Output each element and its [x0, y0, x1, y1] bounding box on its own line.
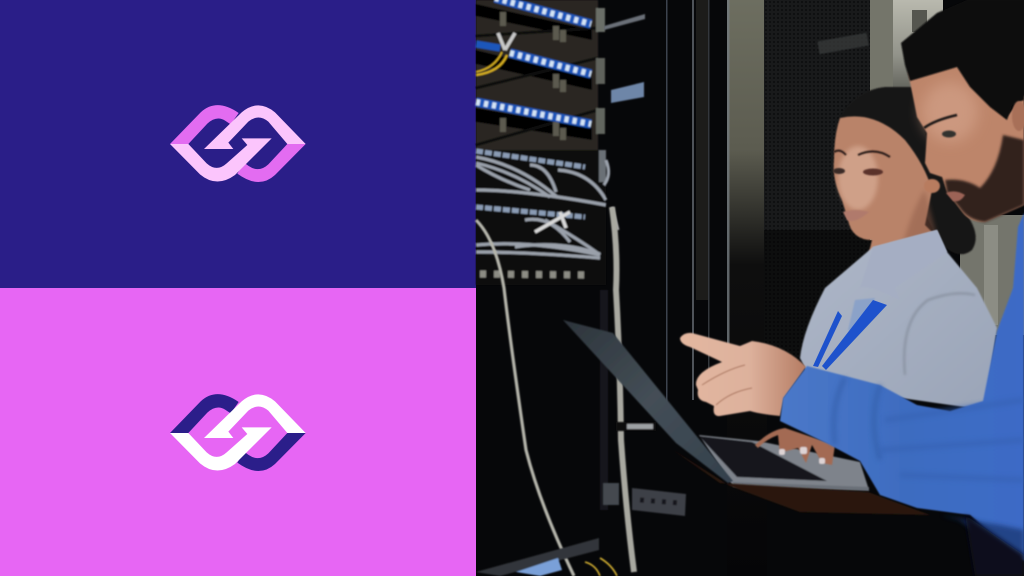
yellow fibre cable — [476, 55, 507, 75]
knob row — [480, 274, 588, 275]
man: beard — [945, 135, 1024, 222]
vent accents — [604, 14, 645, 103]
man: brow and eye — [924, 115, 965, 201]
woman: facial features — [833, 151, 940, 221]
man: pointing hand — [680, 333, 806, 416]
icon: logo on navy — [170, 105, 306, 182]
server rack — [476, 0, 618, 510]
rack bracket — [603, 422, 686, 516]
blue patch panels — [495, 0, 591, 24]
man: hair — [901, 0, 1024, 120]
bottom patch panel — [476, 538, 617, 576]
panel: pink logo background — [0, 288, 476, 576]
woman: hand on keyboard — [755, 428, 835, 465]
grey network cables — [476, 157, 609, 258]
woman: face and neck — [834, 116, 940, 290]
desk edge under the laptop — [673, 450, 930, 515]
woman: polo shirt — [800, 230, 997, 410]
woman: ponytail and hair — [838, 87, 976, 254]
man: face — [908, 58, 1024, 222]
man: blue denim sleeve — [780, 213, 1024, 561]
background wall and cabinet doors — [666, 0, 1024, 576]
panel: navy logo background — [0, 0, 476, 288]
icon: logo on pink — [170, 394, 306, 471]
laptop base with keyboard — [699, 435, 869, 491]
photo: technicians in a server room — [476, 0, 1024, 576]
woman: blue lanyard — [813, 300, 887, 370]
laptop lid — [563, 320, 733, 483]
long white cables — [476, 207, 634, 576]
